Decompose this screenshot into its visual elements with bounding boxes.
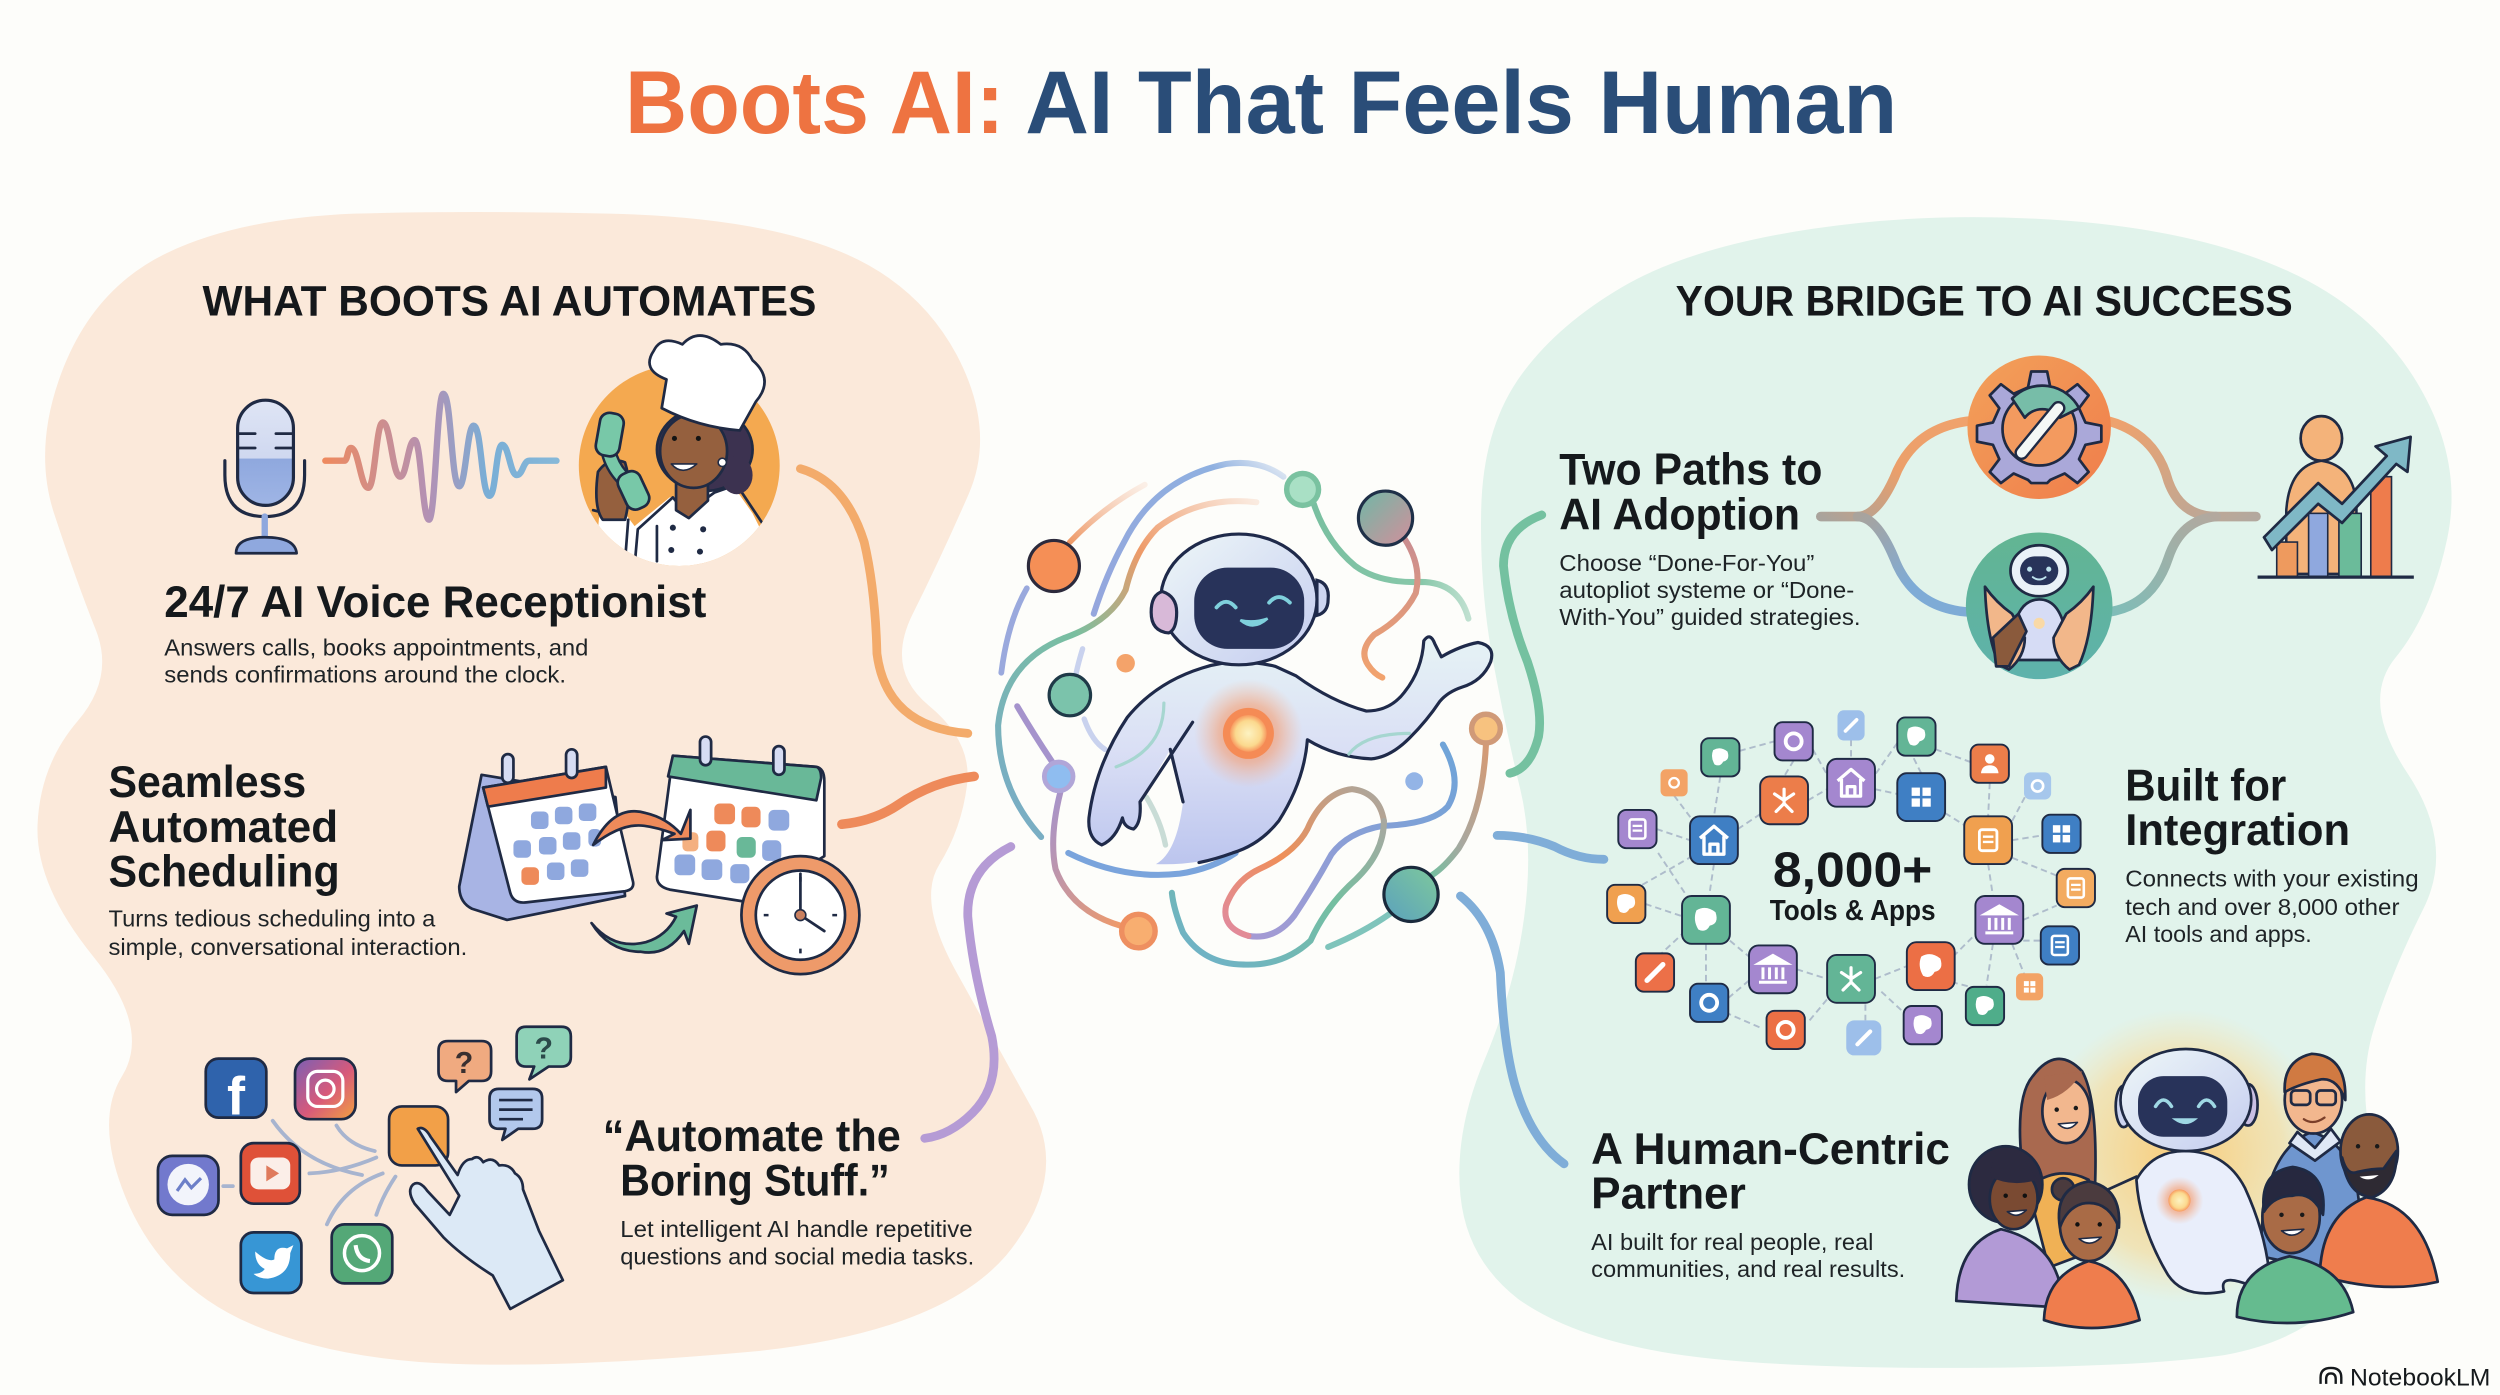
heading: your bridge to AI success: YOUR BRIDGE TO AI SUCCESS <box>1676 278 2293 326</box>
title: Boots AI: <box>625 52 1004 152</box>
diagram: two paths <box>1821 356 2414 679</box>
text block: two paths to AI adoption <box>1559 446 1861 630</box>
text block: built for integration: AI tools and apps. <box>2125 921 2312 947</box>
icon: WhatsApp <box>332 1224 392 1283</box>
icon: calendars and clock <box>459 737 859 974</box>
robot chest glow <box>1194 679 1303 788</box>
text block: two paths to AI adoption: With-You” guided strategies. <box>1559 604 1861 630</box>
node: small blue <box>1405 772 1423 790</box>
icon: gear and wrench circle <box>1967 356 2111 499</box>
icon: person with growth chart <box>2258 416 2414 577</box>
heading: what Boots AI automates: WHAT BOOTS AI AUTOMATES <box>203 278 816 326</box>
icon: right calendar <box>657 737 824 902</box>
connector: robot to partner <box>1460 896 1564 1164</box>
path lines <box>1821 421 2256 612</box>
text block: built for integration: Integration <box>2125 806 2350 855</box>
node: teal <box>1049 674 1091 716</box>
person: girl with bun <box>2044 1178 2140 1328</box>
arrow: orange reschedule <box>593 810 690 845</box>
robot visor <box>1194 568 1304 649</box>
icon: question bubble green: ? <box>534 1033 553 1066</box>
icon cluster: 8,000+ tools network <box>1607 710 2095 1055</box>
text block: a human-centric partner <box>1591 1125 1950 1282</box>
node: tan ring <box>1472 714 1500 743</box>
title: AI That Feels Human <box>1025 52 1897 152</box>
icon: Messenger <box>158 1156 218 1215</box>
icon: message bubble blue <box>490 1089 542 1140</box>
icon: Facebook: f <box>227 1066 246 1126</box>
text block: two paths to AI adoption: Choose “Done-For-You” <box>1559 550 1814 576</box>
warm glow <box>2034 1009 2328 1303</box>
robot body <box>1089 637 1492 864</box>
icon: orange app button <box>389 1106 448 1165</box>
connector lines: social signals <box>223 1121 395 1224</box>
text block: built for integration: Connects with your existing <box>2125 865 2419 891</box>
text block: 24/7 AI voice receptionist: Answers calls, books appointments, and <box>164 634 588 660</box>
panel: what Boots AI automates background <box>37 212 1046 1365</box>
node: blue ring <box>1044 762 1073 791</box>
text block: 24/7 AI voice receptionist: 24/7 AI Voice Receptionist <box>164 578 706 627</box>
network links <box>1642 740 2060 1028</box>
icon: robotic hand <box>410 1128 563 1309</box>
panel: your bridge to AI success background <box>1459 217 2452 1368</box>
text block: 24/7 AI voice receptionist: sends confirmations around the clock. <box>164 661 566 687</box>
text block: 24/7 AI voice receptionist <box>164 578 706 687</box>
connector: robot to two paths <box>1503 515 1542 773</box>
text block: a human-centric partner: communities, and real results. <box>1591 1256 1905 1282</box>
node: pale green <box>1287 474 1319 505</box>
robot smile <box>1217 597 1290 607</box>
title <box>625 52 1897 152</box>
network center label: 8,000+ <box>1773 842 1932 897</box>
icon: social media automation <box>158 1027 571 1309</box>
connector: scheduling to robot <box>842 776 974 824</box>
icon: chef on the phone <box>579 336 784 577</box>
icon: Facebook <box>206 1059 266 1126</box>
person: man with glasses <box>2261 1054 2360 1275</box>
robot companion <box>2101 1049 2270 1295</box>
node: large orange <box>1028 540 1079 591</box>
person: woman with long hair <box>2020 1059 2113 1267</box>
node: teal-rose <box>1358 491 1413 545</box>
icon: Instagram <box>295 1059 356 1119</box>
connector: robot to integration <box>1497 835 1604 859</box>
text block: seamless automated scheduling: Automated <box>108 803 338 852</box>
swirl lines <box>998 463 1486 965</box>
node: dark green <box>1384 867 1438 921</box>
network center label: Tools & Apps <box>1770 895 1936 927</box>
illustration: people with robot <box>1956 1009 2438 1328</box>
text block: a human-centric partner: Partner <box>1591 1169 1746 1218</box>
text block: automate the boring stuff: Boring Stuff.” <box>620 1157 890 1206</box>
text block: a human-centric partner: AI built for real people, real <box>1591 1229 1873 1255</box>
connector: social to robot <box>925 847 1011 1138</box>
network center label <box>1770 842 1936 927</box>
text block: seamless automated scheduling: Seamless <box>108 758 306 807</box>
node: orange ring <box>1122 914 1155 948</box>
text block: two paths to AI adoption: Two Paths to <box>1559 446 1822 495</box>
person: woman with curly hair <box>1956 1146 2060 1307</box>
icon: YouTube <box>241 1143 300 1204</box>
text block: a human-centric partner: A Human-Centric <box>1591 1125 1950 1174</box>
robot head <box>1151 534 1328 665</box>
text block: automate the boring stuff: Let intelligent AI handle repetitive <box>620 1216 973 1242</box>
text block: automate the boring stuff <box>603 1112 974 1269</box>
icon: left calendar <box>459 749 633 920</box>
node: small orange <box>1116 654 1135 672</box>
icon: clock <box>741 856 859 974</box>
icon: question bubble orange <box>439 1041 491 1092</box>
text block: seamless automated scheduling: Scheduling <box>108 847 340 896</box>
watermark: NotebookLM: NotebookLM <box>2350 1364 2490 1391</box>
arrow: green reschedule <box>592 906 697 953</box>
text block: built for integration <box>2125 761 2419 947</box>
text block: two paths to AI adoption: autopliot systeme or “Done- <box>1559 577 1854 603</box>
illustration: central robot with swirling lines <box>998 463 1500 965</box>
icon: question bubble green <box>517 1027 571 1079</box>
app icons <box>1607 710 2095 1055</box>
text block: automate the boring stuff: questions and social media tasks. <box>620 1243 974 1269</box>
icon: robot in helping hands circle <box>1966 532 2113 679</box>
person: bald bearded man <box>2320 1114 2438 1287</box>
text block: seamless automated scheduling: simple, conversational interaction. <box>108 934 467 960</box>
text block: seamless automated scheduling <box>108 758 467 960</box>
text block: built for integration: Built for <box>2125 761 2286 810</box>
text block: built for integration: tech and over 8,000 other <box>2125 894 2400 920</box>
robot arm accents <box>1116 703 1409 767</box>
icon: question bubble orange: ? <box>455 1047 473 1080</box>
text block: seamless automated scheduling: Turns tedious scheduling into a <box>108 905 435 931</box>
icon: microphone <box>225 400 305 553</box>
connector: voice to robot <box>800 469 968 733</box>
icon: Twitter <box>241 1232 301 1293</box>
text block: automate the boring stuff: “Automate the <box>603 1112 901 1161</box>
person: man in green <box>2237 1167 2353 1323</box>
icon: voice waveform <box>325 394 556 520</box>
text block: two paths to AI adoption: AI Adoption <box>1559 490 1800 539</box>
